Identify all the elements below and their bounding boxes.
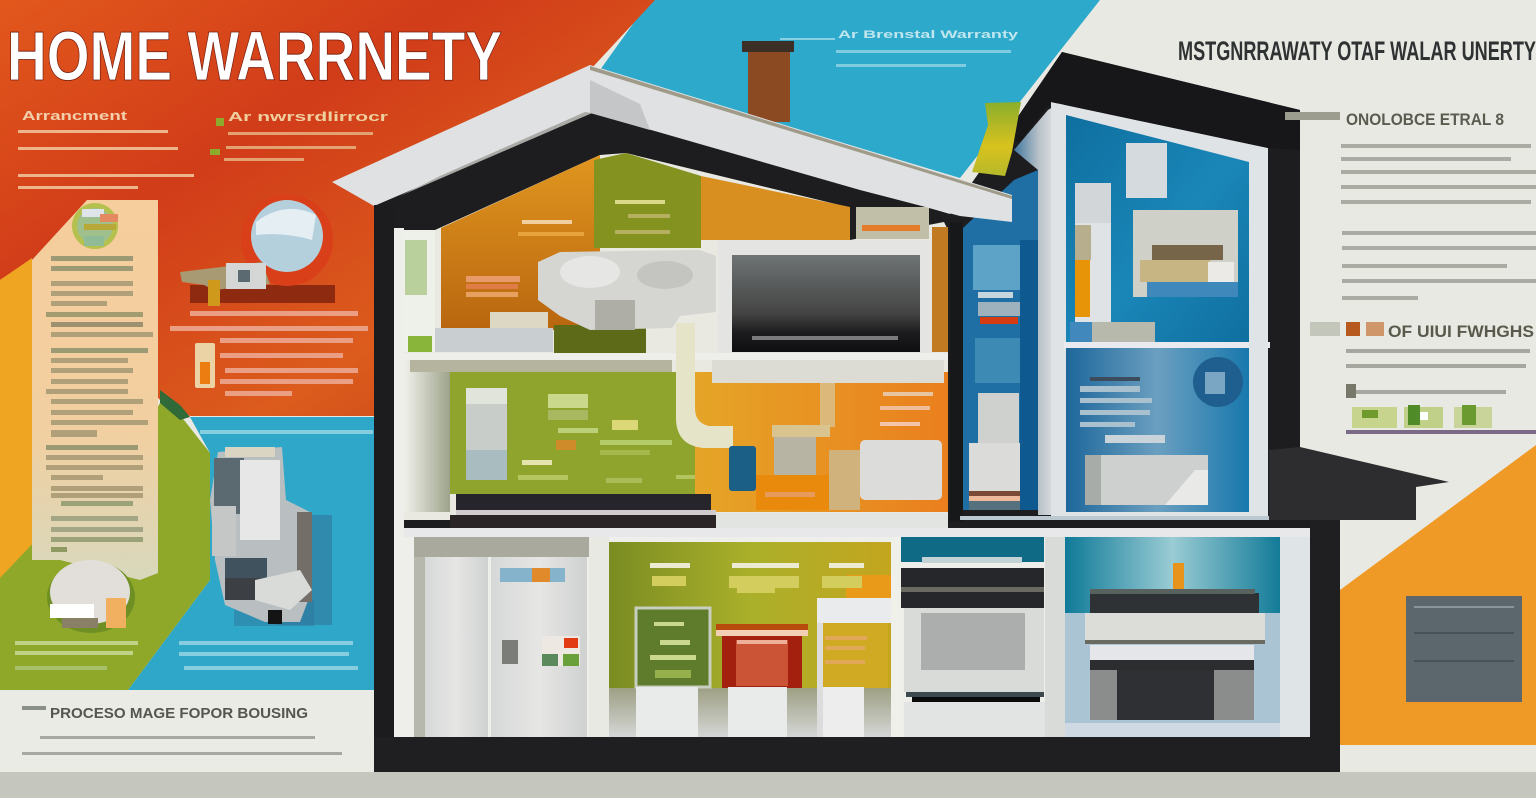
icon: water heater machine xyxy=(210,447,332,626)
icon: wall TV xyxy=(718,240,932,353)
text block: red lower xyxy=(170,311,368,396)
house base xyxy=(374,205,1340,772)
text block: right paragraphs xyxy=(1341,144,1536,300)
top callout xyxy=(780,29,1019,67)
text block: red column two: Ar nwrsrdlirrocr xyxy=(228,109,388,124)
right-hand panel: heading: ONOLOBCE ETRAL 8 xyxy=(1346,110,1504,129)
house body xyxy=(374,52,1340,772)
shelf xyxy=(404,353,948,360)
counter xyxy=(716,513,948,528)
icons: green feature badges xyxy=(1346,405,1536,434)
text block: red column one: Arrancment xyxy=(22,108,128,123)
text block: red column one xyxy=(18,108,194,189)
panel: bottom floor xyxy=(394,537,1310,737)
roof: main white gable xyxy=(332,65,1012,222)
text block: green caption xyxy=(15,641,138,670)
icon: refrigerator xyxy=(414,537,589,737)
panel: green utility room xyxy=(404,360,726,512)
heading: right second: OF UIUI FWHGHS xyxy=(1388,322,1534,341)
top callout: Ar Brenstal Warranty xyxy=(838,29,1019,41)
heading: right second xyxy=(1310,322,1534,398)
panel: bottom left note xyxy=(22,705,342,755)
panel: attic and upper left room xyxy=(395,153,948,520)
panel: cream scroll note xyxy=(32,200,158,580)
icon: grey appliance panel xyxy=(1406,596,1522,702)
house dark shell xyxy=(374,52,1340,772)
roof: right tower xyxy=(1004,52,1449,520)
panel: oven xyxy=(891,537,1065,737)
icon: small canister xyxy=(195,343,215,388)
panel: orange utility room xyxy=(676,323,948,512)
icon: yellow-green pennant xyxy=(972,102,1021,176)
icon: chimney xyxy=(742,41,794,122)
text block: blue caption xyxy=(179,430,373,670)
right-hand panel: heading xyxy=(1178,36,1536,129)
panel: teal kitchen range xyxy=(1065,537,1280,737)
panel: bottom left note: PROCESO MAGE FOPOR BOUSING xyxy=(50,705,308,722)
title: HOME WARRNETY xyxy=(7,17,502,95)
icon: gauge and wrench xyxy=(180,194,335,306)
icon: cooktop strip xyxy=(450,494,716,528)
panel: left red text blocks xyxy=(18,108,388,396)
panel: green pantry xyxy=(589,537,894,737)
icon: bowl badge xyxy=(47,560,135,633)
panel: right tower upper room xyxy=(1051,102,1270,520)
text block: red column two xyxy=(210,109,388,161)
icon: globe badge xyxy=(72,203,118,249)
panel: right tower lower room xyxy=(1066,348,1249,512)
icon: air handler unit xyxy=(435,250,716,352)
panel: narrow blue column xyxy=(963,100,1064,515)
